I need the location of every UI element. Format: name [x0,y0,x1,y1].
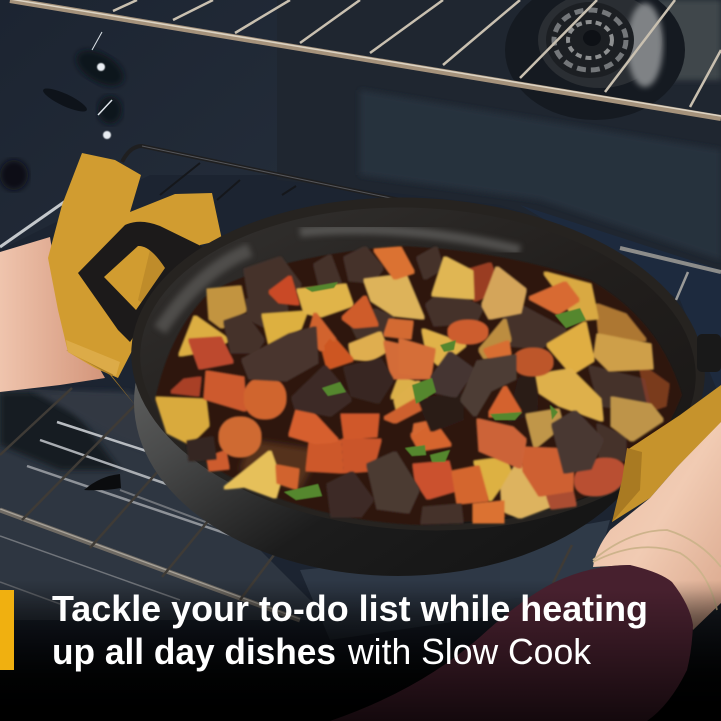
left oven wall [0,0,277,250]
right oven towel [612,385,721,522]
pan outer body [134,228,662,576]
small towel loop on oven floor [84,474,121,490]
lower oven floor [0,388,330,620]
headline: with Slow Cook [347,631,592,672]
bottom dark gradient behind sleeve [0,580,721,721]
left hand [0,237,105,392]
icon: oven convection fan [505,0,685,120]
carrot chunks [172,248,629,522]
bracelets [593,530,721,610]
front layer of beef [188,315,602,523]
headline [52,588,648,672]
left oven towel [48,153,222,405]
stew sauce bed [155,246,682,525]
pan interior [132,194,704,538]
headline: Tackle your to-do list while heating [52,588,648,629]
pan highlights [160,250,250,330]
back oven wall [277,0,721,270]
parsley garnish [284,282,586,500]
potato chunks [157,258,662,517]
right hand and wrist [593,422,721,630]
yellow accent bar [0,590,14,670]
back layer of beef [245,248,668,460]
pan handle [78,222,205,342]
top oven rack [10,0,721,118]
pan rim [123,183,713,545]
right pan handle [697,334,721,372]
middle oven rack [0,146,721,300]
bottom oven rack [0,388,572,620]
sleeve [330,565,693,721]
cast iron pan [123,183,721,576]
beef stew [155,246,682,525]
bottom dark gradient over sleeve [0,590,721,721]
headline: up all day dishes [52,631,336,672]
